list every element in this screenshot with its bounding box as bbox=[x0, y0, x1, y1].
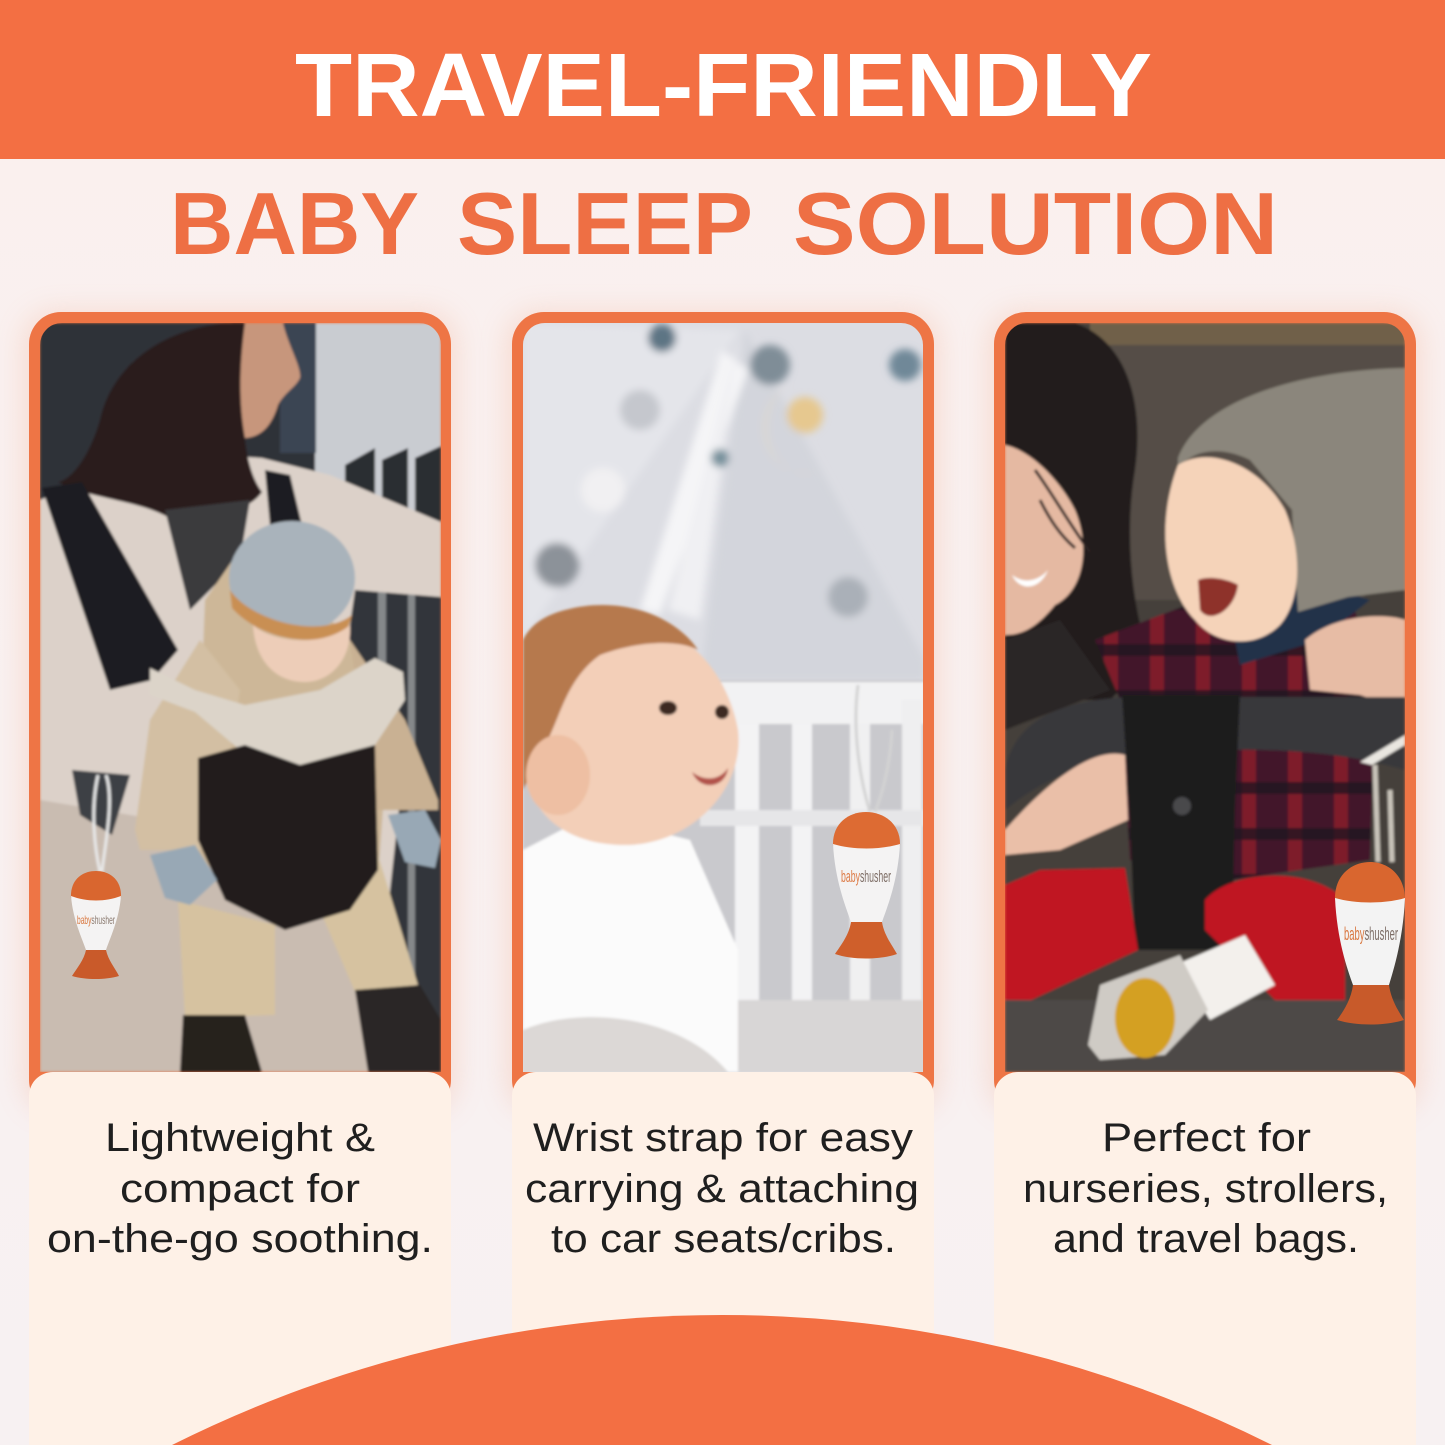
caption text bbox=[47, 1116, 433, 1261]
caption text: carrying & attaching bbox=[525, 1167, 919, 1211]
photo: smiling baby looking at device bbox=[523, 323, 925, 1072]
photo: mother carrying baby with device bbox=[40, 323, 441, 1072]
caption text: compact for bbox=[120, 1167, 360, 1211]
title: travel-friendly: TRAVEL-FRIENDLY bbox=[295, 36, 1152, 136]
icon: baby shusher device bbox=[71, 871, 121, 979]
photo: mother and laughing baby in stroller bbox=[1005, 323, 1405, 1072]
caption text bbox=[525, 1116, 919, 1261]
icon: baby shusher device bbox=[833, 812, 900, 958]
caption card: wrist strap bbox=[512, 1072, 934, 1445]
icon: baby shusher device: babyshusher bbox=[77, 913, 115, 927]
subtitle: baby sleep solution: SLEEP bbox=[457, 174, 753, 273]
caption text: and travel bags. bbox=[1053, 1217, 1359, 1261]
subtitle: baby sleep solution: SOLUTION bbox=[793, 174, 1278, 273]
panel: lightweight and compact bbox=[24, 312, 456, 1445]
bottom orange arc bbox=[172, 1315, 1272, 1445]
caption text: to car seats/cribs. bbox=[551, 1217, 896, 1261]
caption text: Perfect for bbox=[1102, 1116, 1311, 1160]
icon: baby shusher device: babyshusher bbox=[841, 867, 891, 886]
caption text bbox=[1023, 1116, 1388, 1261]
subtitle: baby sleep solution bbox=[170, 174, 1278, 273]
panel: perfect for nurseries bbox=[989, 312, 1421, 1445]
caption text: Wrist strap for easy bbox=[533, 1116, 913, 1160]
caption text: nurseries, strollers, bbox=[1023, 1167, 1388, 1211]
caption text: Lightweight & bbox=[105, 1116, 375, 1160]
panel: wrist strap bbox=[507, 312, 939, 1445]
caption text: on-the-go soothing. bbox=[47, 1217, 433, 1261]
header banner bbox=[0, 0, 1445, 159]
caption card: perfect for bbox=[994, 1072, 1416, 1445]
subtitle: baby sleep solution: BABY bbox=[170, 174, 419, 273]
icon: baby shusher device: babyshusher bbox=[1344, 924, 1398, 944]
caption card: lightweight bbox=[29, 1072, 451, 1445]
icon: baby shusher device bbox=[1335, 862, 1405, 1024]
